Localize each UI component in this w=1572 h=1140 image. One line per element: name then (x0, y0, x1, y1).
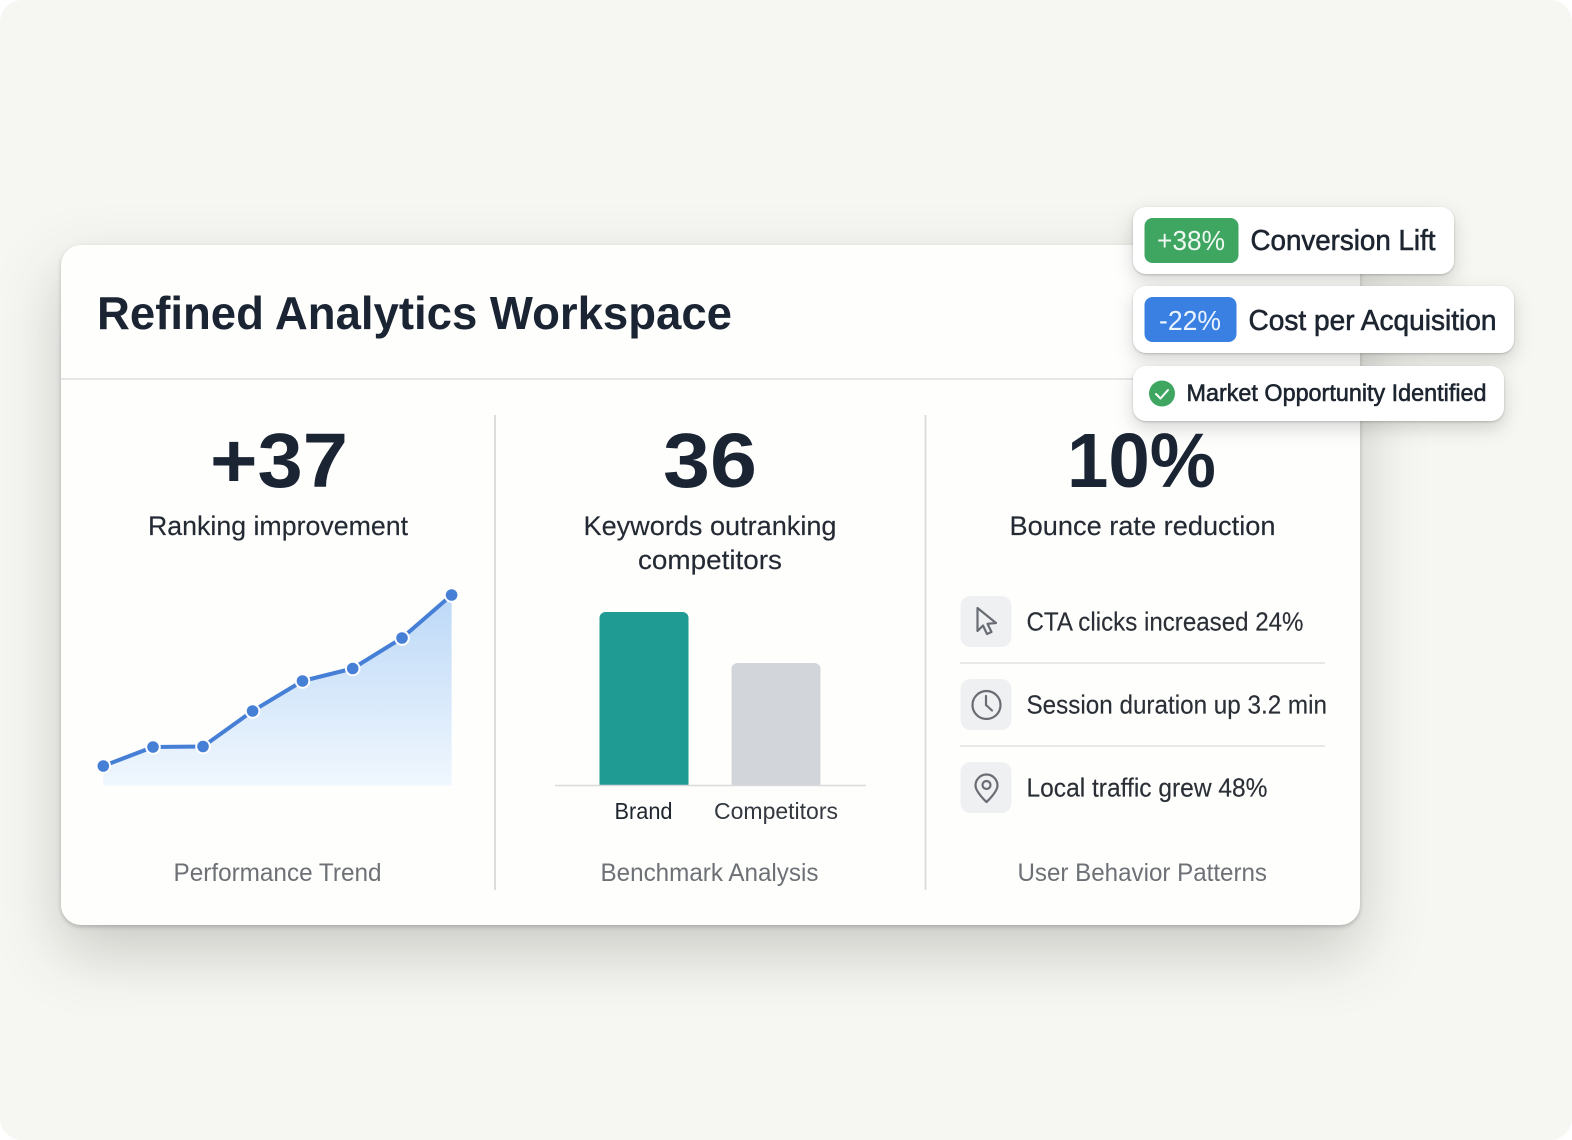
metric label: keywords outranking competitors (584, 511, 836, 575)
caption: performance trend: Performance Trend (174, 859, 382, 887)
callout: cost per acquisition (1133, 286, 1514, 353)
panel: keywords (555, 418, 866, 887)
list row: session duration: Session duration up 3.2 min (1026, 690, 1327, 720)
bar chart: brand vs competitors: Brand (614, 798, 672, 824)
callout: market opportunity (1133, 366, 1504, 421)
icon: clock (972, 691, 1000, 719)
list row: CTA clicks: CTA clicks increased 24% (1026, 606, 1304, 636)
title: Refined Analytics Workspace (97, 287, 732, 339)
callout: cost per acquisition: Cost per Acquisition (1248, 305, 1496, 337)
icon: check (1149, 380, 1175, 406)
bar chart: brand vs competitors (555, 612, 866, 824)
panel: ranking (96, 418, 458, 887)
callout: conversion lift: Conversion Lift (1250, 225, 1436, 257)
list row: local traffic (960, 762, 1268, 813)
metric label: ranking improvement: Ranking improvement (148, 511, 408, 541)
panel: behavior (960, 418, 1327, 887)
caption: benchmark analysis: Benchmark Analysis (600, 859, 818, 887)
callout: conversion lift (1133, 207, 1454, 274)
callout: cost per acquisition: -22% (1159, 305, 1221, 336)
metric: 36: 36 (663, 418, 757, 504)
caption: user behavior patterns: User Behavior Patterns (1018, 859, 1267, 887)
list row: local traffic: Local traffic grew 48% (1026, 772, 1268, 802)
line chart: performance trend (96, 588, 458, 786)
callout: conversion lift: +38% (1157, 225, 1225, 256)
icon: location pin (976, 775, 998, 802)
metric: +37: +37 (210, 418, 348, 504)
metric label: keywords outranking competitors: competitors (638, 545, 782, 575)
metric label: keywords outranking competitors: Keywords outranking (584, 511, 836, 541)
metric: 10%: 10% (1067, 418, 1216, 504)
icon: cursor (978, 608, 996, 634)
list row: session duration (960, 679, 1327, 730)
bar chart: brand vs competitors: Competitors (714, 798, 838, 824)
metric label: bounce rate reduction: Bounce rate reduction (1010, 511, 1276, 541)
panel: dashboard card (61, 245, 1360, 925)
callout: market opportunity: Market Opportunity Identified (1186, 380, 1486, 407)
list row: CTA clicks (960, 596, 1304, 647)
